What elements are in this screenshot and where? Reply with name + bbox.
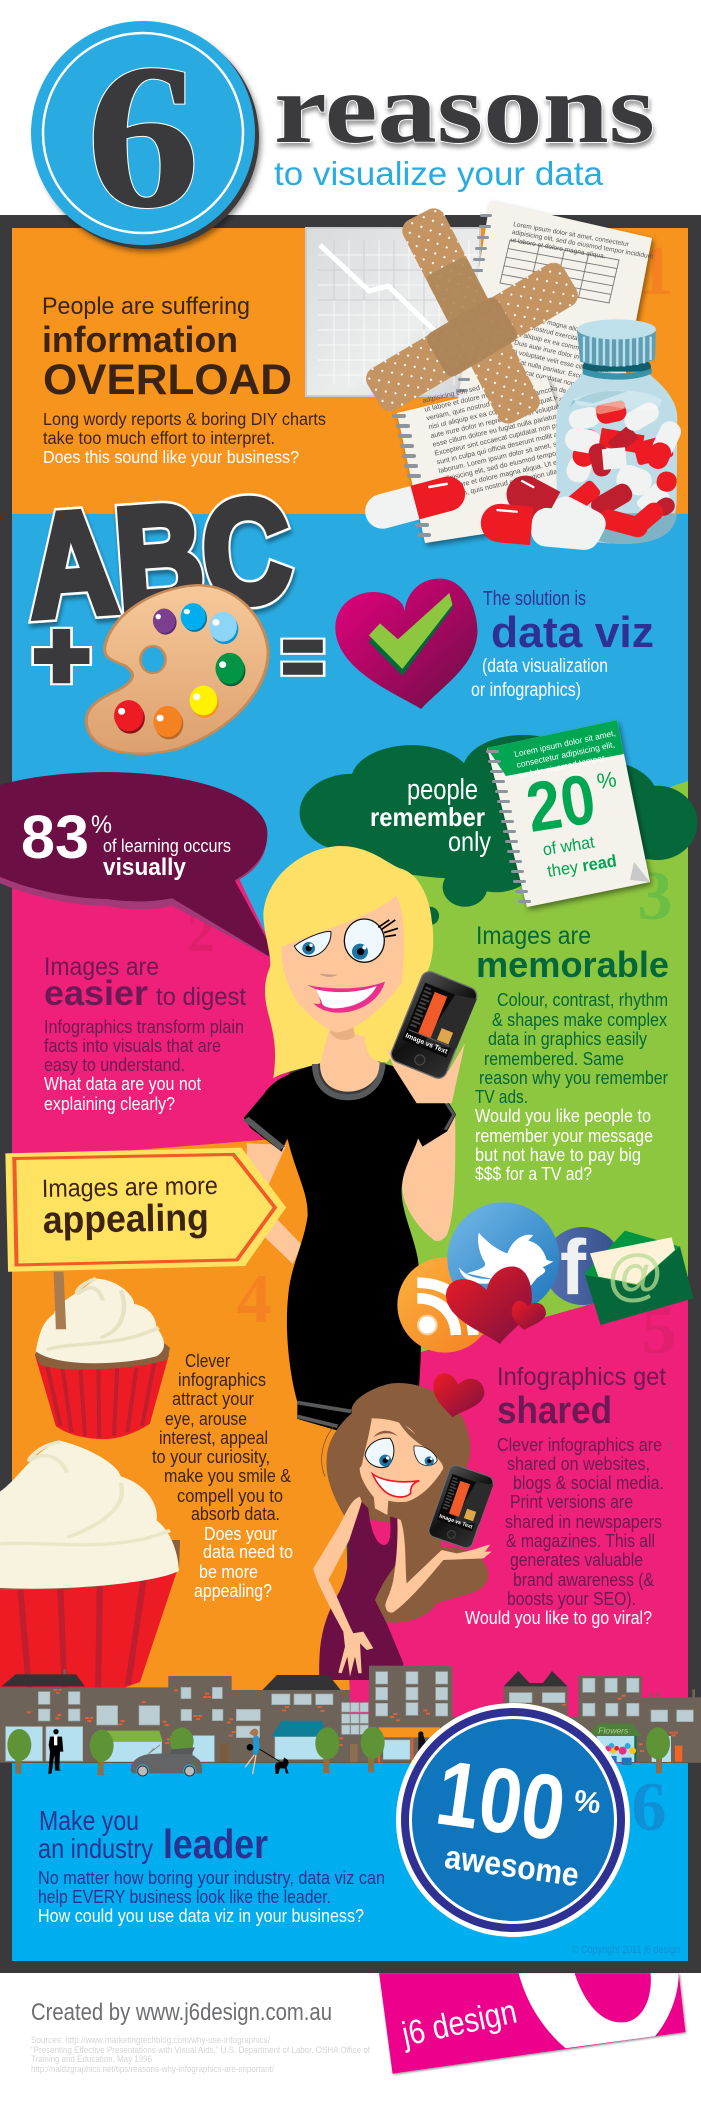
notebook: 20 percent <box>486 720 650 907</box>
badge: 100 percent awesome: awesome <box>443 1838 581 1893</box>
text block: shared body: boosts your SEO). <box>507 1589 636 1609</box>
text block: shared body: Clever infographics are <box>497 1435 662 1455</box>
icon: twitter <box>447 1202 559 1314</box>
sign: images are more appealing <box>5 1148 286 1272</box>
text: make you an industry leader: Make you <box>39 1805 139 1836</box>
text block: appealing body: to your curiosity, <box>152 1447 270 1467</box>
text block: digest body <box>44 1017 244 1114</box>
text block: appealing body: appealing? <box>194 1581 272 1601</box>
text block: digest body: explaining clearly? <box>44 1094 175 1114</box>
convertible car <box>131 1745 202 1777</box>
text: infographics get shared: shared <box>497 1390 612 1432</box>
section background: memorable green <box>380 781 688 1353</box>
text block: digest body: What data are you not <box>44 1074 201 1094</box>
header badge with numeral 6 <box>31 21 259 251</box>
man in suit <box>418 1731 426 1755</box>
text block: shared body: generates valuable <box>510 1550 643 1570</box>
sign post <box>54 1272 66 1329</box>
notebook: report pages front: adipisicing elit, sed do eiusmod tempor <box>440 450 560 484</box>
text block: appealing body: attract your <box>172 1389 254 1409</box>
heading: information overload <box>42 293 292 404</box>
icon: heart with check mark <box>335 578 478 709</box>
text block: shared body: shared in newspapers <box>505 1512 662 1532</box>
arms <box>247 1071 455 1264</box>
text block: memorable body: remember your message <box>475 1126 653 1146</box>
footer sources: Training and Education, May 1996 <box>31 2054 152 2065</box>
notebook: report pages back: quis nostrud exercitation ullamco nisi <box>518 322 625 353</box>
eyes <box>365 1438 437 1468</box>
notebook: report pages front: sunt in culpa qui officia deserunt mollit anim. <box>436 429 571 466</box>
text block: overload body <box>43 409 326 467</box>
notebook: report pages back <box>454 201 655 445</box>
footer card: j6 design logo <box>379 1973 685 2074</box>
plus sign <box>33 628 91 684</box>
text block: shared body: blogs & social media. <box>513 1473 664 1493</box>
text block: appealing body: be more <box>199 1562 258 1582</box>
heading: information overload: information <box>42 319 238 360</box>
text: images are easier to digest <box>44 953 246 1013</box>
icon: facebook <box>544 1223 622 1311</box>
trees <box>361 1727 670 1773</box>
data table <box>500 240 619 303</box>
footer sources: http://naldzgraphics.net/tips/reasons-why-infographics-are-important/ <box>31 2064 274 2075</box>
text block: leader body: No matter how boring your industry, data viz can <box>38 1867 385 1888</box>
notebook: report pages back: in culpa qui officia deserunt mollit <box>505 375 602 403</box>
equals sign <box>282 639 324 676</box>
text block: appealing body <box>152 1351 293 1601</box>
section background: solution blue <box>12 514 688 1014</box>
text: the solution is data viz: or infographics) <box>471 680 581 701</box>
notebook: report pages front: Excepteur sint occaecat cupidatat non proident, <box>434 418 579 458</box>
notebook: report pages back: adipisicing elit, sed do eiusmod tempor incididunt <box>511 229 654 261</box>
text block: memorable body: Colour, contrast, rhythm <box>497 990 668 1010</box>
text block: memorable body: TV ads. <box>475 1087 528 1107</box>
section number 6: 6 <box>632 1769 666 1846</box>
notebook: report pages front: laborum. Lorem ipsum dolor sit amet, sed do <box>438 437 575 475</box>
text: images are memorable: memorable <box>476 944 669 985</box>
section background: appealing orange <box>12 1138 350 1700</box>
text block: memorable body <box>475 990 668 1184</box>
text block: appealing body: interest, appeal <box>159 1428 268 1448</box>
text: images are memorable <box>476 922 669 985</box>
text: people remember only: remember <box>370 802 485 832</box>
notebook: 20 percent: they read <box>546 851 618 881</box>
text block: memorable body: $$$ for a TV ad? <box>475 1164 592 1184</box>
speech bubble: 83 percent <box>0 772 279 963</box>
icon: pill bottle <box>556 319 684 544</box>
black dress <box>244 1064 456 1431</box>
text block: memorable body: Would you like people to <box>475 1106 651 1126</box>
phone: Image vs Text <box>438 1513 473 1530</box>
text block: leader body: How could you use data viz in your business? <box>38 1905 364 1926</box>
speech bubble: 83 percent: 83 <box>21 803 89 871</box>
icon: large capsules <box>361 469 610 551</box>
footer credit: Created by www.j6design.com.au <box>31 1999 332 2026</box>
notebook: 20 percent: consectetur adipisicing elit, <box>516 739 616 770</box>
arms <box>313 1497 492 1677</box>
text block: memorable body: & shapes make complex <box>492 1010 667 1030</box>
text block: appealing body: Clever <box>185 1351 230 1371</box>
speech bubble: 83 percent: % <box>91 811 112 839</box>
notebook: report pages back: Lorem ipsum dolor sit amet, consectetur <box>513 221 630 248</box>
notebook: 20 percent: of what <box>541 832 596 859</box>
notebook: report pages front: nisi ut aliquip ex ea commodo consequat. <box>428 396 555 431</box>
phone: Image vs Text <box>404 1032 449 1056</box>
text block: leader body <box>38 1867 385 1926</box>
badge: 100 percent awesome: 100 <box>430 1742 571 1861</box>
footer sources <box>31 2035 370 2075</box>
text block: appealing body: Does your <box>204 1524 277 1544</box>
sign: images are more appealing: Images are more <box>42 1172 218 1203</box>
notebook: report pages back: in voluptate velit esse cillum dolore eu <box>511 348 622 380</box>
text block: shared body: shared on websites, <box>507 1454 650 1474</box>
thought bubble dot <box>421 907 439 925</box>
notebook: 20 percent: 20 <box>521 759 601 847</box>
flower shop <box>588 1723 642 1765</box>
text block: overload body: Does this sound like your business? <box>43 447 299 467</box>
street scene: right buildings <box>350 1666 701 1773</box>
text: people remember only: only <box>448 826 491 857</box>
notebook: 20 percent: Lorem ipsum dolor sit amet, <box>513 728 617 759</box>
notebook: report pages back: ut aliquip ex ea commodo consequat. <box>516 331 624 362</box>
man on phone <box>48 1729 63 1774</box>
thought cloud <box>300 735 697 925</box>
text: the solution is data viz <box>471 588 654 701</box>
notebook: 20 percent: % <box>595 766 618 794</box>
section background: shared pink <box>350 1277 688 1720</box>
text block: memorable body: reason why you remember <box>479 1068 668 1088</box>
neck and face <box>373 1493 388 1515</box>
notebook: report pages front: adipisicing elit, sed do <box>422 383 490 405</box>
notebook: report pages back: occaecat cupidatat non proident, sunt <box>507 366 616 397</box>
subtitle: to visualize your data <box>274 155 604 192</box>
notebook: report pages front: ut labore et dolore magna aliqua. Ut enim <box>442 457 569 493</box>
icon: crossed bandages <box>361 204 583 428</box>
dress <box>319 1502 403 1680</box>
footer sources: Sources: http://www.marketingtechblog.com/why-use-infographics/ <box>31 2035 270 2046</box>
text: infographics get shared: Infographics get <box>497 1363 666 1391</box>
notebook: report pages front: veniam, quis nostrud exercitation ullamco <box>444 466 571 501</box>
notebook: report pages front: aute irure dolor in reprehenderit in voluptate <box>430 403 564 440</box>
notebook: report pages front: veniam, quis nostrud exercitation ullamco <box>426 387 553 422</box>
blonde woman with phone <box>244 846 480 1431</box>
notebook: report pages back: fugiat nulla pariatur. Excepteur sint <box>509 357 610 387</box>
text block: memorable body: remembered. Same <box>484 1049 624 1069</box>
ABC lettering: ABC <box>23 467 296 648</box>
section number 2: 2 <box>187 902 215 964</box>
text: people remember only <box>370 774 491 857</box>
icon: small cupcake <box>35 1279 170 1439</box>
notebook: report pages back: adipisicing elit, sed do eiusmod <box>501 392 592 419</box>
woman walking dog <box>245 1729 289 1774</box>
phone <box>389 969 480 1081</box>
hearts <box>446 1266 546 1344</box>
text: the solution is data viz: The solution is <box>483 588 586 610</box>
eyes <box>294 919 398 962</box>
sign: images are more appealing: appealing <box>42 1197 209 1242</box>
text: the solution is data viz: (data visualization <box>482 656 608 677</box>
section number 5: 5 <box>642 1292 676 1369</box>
text block: appealing body: absorb data. <box>191 1504 280 1524</box>
text block: memorable body: but not have to pay big <box>475 1145 641 1165</box>
text: make you an industry leader: leader <box>163 1821 268 1867</box>
section background: overload orange <box>12 228 688 514</box>
notebook: report pages back: et dolore magna aliqua. Ut enim ad minim <box>520 313 641 348</box>
notebook: 20 percent: sed do eiusmod tempor <box>518 752 606 780</box>
section number 3: 3 <box>638 858 672 935</box>
text block: overload body: Long wordy reports & boring DIY charts <box>43 409 326 429</box>
notebook: report pages front: esse cillum dolore eu fugiat nulla pariatur. <box>432 413 559 449</box>
section number 4: 4 <box>236 1261 272 1338</box>
flower shop: Flowers <box>598 1726 628 1735</box>
brunette woman with phone <box>313 1383 495 1680</box>
text: the solution is data viz: data viz <box>491 608 654 657</box>
text block: appealing body: infographics <box>178 1370 266 1390</box>
ABC lettering: ABC <box>23 467 296 648</box>
text: images are memorable: Images are <box>476 922 591 950</box>
smile <box>307 982 385 1013</box>
icon: large cupcake <box>0 1441 180 1700</box>
text block: shared body: Print versions are <box>510 1492 633 1512</box>
text block: digest body: easy to understand. <box>44 1055 185 1075</box>
capsules inside bottle <box>563 399 684 539</box>
text: images are easier to digest: easier <box>44 974 148 1013</box>
trees <box>7 1727 339 1775</box>
icon: facebook: f <box>560 1223 587 1311</box>
footer card: j6 design logo: j6 design <box>398 1993 520 2054</box>
text block: appealing body: data need to <box>203 1542 293 1562</box>
icon: envelope: @ <box>607 1243 663 1306</box>
icon: heart above brunette <box>433 1373 484 1417</box>
text block: digest body: facts into visuals that are <box>44 1036 221 1056</box>
footer sources: “Presenting Effective Presentations with Visual Aids,” U.S. Department of Labor, OSHA Office of <box>31 2045 370 2056</box>
copyright: © Copyright 2011 j6 design <box>572 1944 680 1956</box>
hair <box>327 1383 488 1623</box>
speech bubble: 83 percent: of learning occurs <box>103 836 231 856</box>
icon: paint palette <box>86 585 268 754</box>
text block: shared body: Would you like to go viral? <box>465 1608 652 1628</box>
notebook: report pages front: ut labore et dolore magna aliqua. <box>424 384 525 414</box>
notebook: report pages front <box>392 365 593 543</box>
badge: 100 percent awesome <box>396 1703 630 1937</box>
text block: appealing body: eye, arouse <box>165 1409 247 1429</box>
notebook: report pages back: Duis aute irure dolor in reprehenderit <box>513 339 620 370</box>
smile <box>373 1474 419 1497</box>
text block: digest body: Infographics transform plain <box>44 1017 244 1037</box>
heading: information overload: People are suffering <box>42 293 250 320</box>
header badge with numeral 6: 6 <box>86 21 200 251</box>
icon: rss <box>397 1257 493 1353</box>
text block: shared body <box>465 1435 664 1628</box>
text block: appealing body: make you smile & <box>164 1466 291 1486</box>
notebook: report pages back: ut labore et dolore magna aliqua. <box>510 237 606 260</box>
speech bubble: 83 percent: visually <box>103 854 187 881</box>
text: people remember only: people <box>407 774 478 806</box>
text block: appealing body: compell you to <box>177 1486 283 1506</box>
holding hand <box>387 1043 465 1103</box>
street scene: left buildings <box>0 1669 350 1777</box>
section background: digest pink <box>12 870 300 1190</box>
head and hair <box>263 846 480 1103</box>
badge: 100 percent awesome: % <box>572 1784 603 1821</box>
notebook: report pages back: Lorem ipsum dolor sit amet, sed do <box>503 383 606 413</box>
text: images are easier to digest: Images are <box>44 953 159 981</box>
text: infographics get shared <box>497 1363 666 1432</box>
icons: social media cluster <box>397 1202 693 1353</box>
text block: shared body: & magazines. This all <box>506 1531 655 1551</box>
illustration: falling chart panel <box>306 228 480 396</box>
phone <box>427 1464 495 1550</box>
title: reasons: reasons <box>274 53 655 164</box>
section background: leader blue <box>12 1763 688 1961</box>
text block: memorable body: data in graphics easily <box>488 1029 647 1049</box>
text block: shared body: brand awareness (& <box>513 1570 654 1590</box>
text: images are easier to digest: to digest <box>156 983 246 1011</box>
heading: information overload: OVERLOAD <box>43 356 292 404</box>
icon: envelope <box>585 1231 693 1325</box>
text: make you an industry leader <box>38 1805 268 1867</box>
text block: leader body: help EVERY business look like the leader. <box>38 1886 331 1907</box>
text: make you an industry leader: an industry <box>38 1833 153 1864</box>
text block: overload body: take too much effort to interpret. <box>43 428 275 448</box>
section number 1: 1 <box>638 233 674 310</box>
